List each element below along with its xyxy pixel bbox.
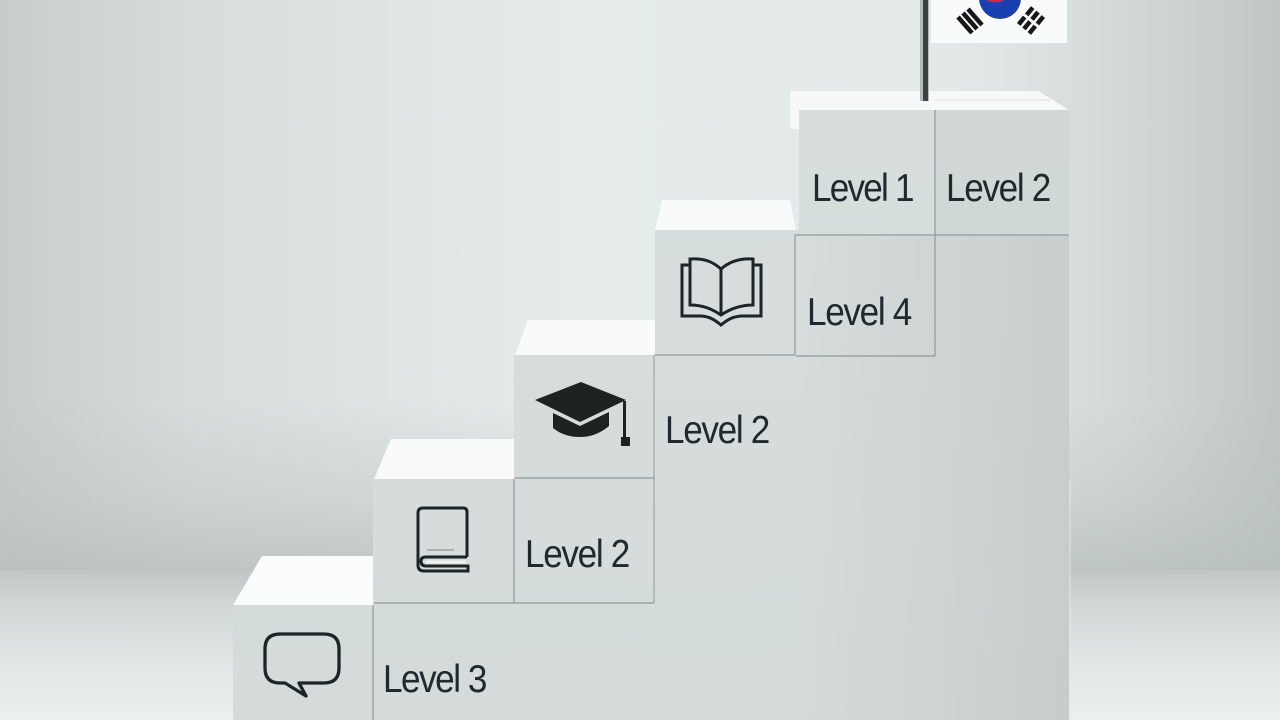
left trigram — [958, 9, 982, 33]
top of step 4 — [655, 200, 796, 230]
background: wall shadow near horizon — [0, 400, 1280, 570]
icon: closed book — [418, 508, 468, 571]
block edge lines — [373, 100, 1069, 720]
label: Level 1: Level 1 — [812, 165, 915, 209]
label: Level 2 upper: Level 2 — [665, 407, 770, 451]
flag of South Korea — [931, 0, 1067, 43]
taegeuk circle — [979, 0, 1021, 19]
top of step 1 — [233, 556, 373, 605]
top block shading — [935, 110, 1069, 235]
icon: open book — [682, 259, 761, 325]
top of step 2 — [374, 439, 514, 479]
top of step 5 — [790, 91, 1069, 130]
icon: speech bubble — [265, 634, 339, 696]
flag pole — [920, 0, 929, 101]
staircase body — [233, 110, 1069, 720]
label: Level 3: Level 3 — [383, 656, 487, 700]
right edge highlight — [1069, 480, 1071, 720]
staircase — [233, 91, 1071, 720]
flag cloth — [931, 0, 1067, 43]
label: Level 4: Level 4 — [807, 289, 912, 333]
right column shading — [800, 236, 1069, 720]
icon: graduation cap — [535, 382, 630, 446]
label: Level 2 lower: Level 2 — [525, 531, 630, 575]
background: floor — [0, 570, 1280, 720]
top of step 3 — [515, 320, 655, 355]
label: Level 2 top right: Level 2 — [946, 165, 1051, 209]
right trigram — [1019, 8, 1043, 33]
